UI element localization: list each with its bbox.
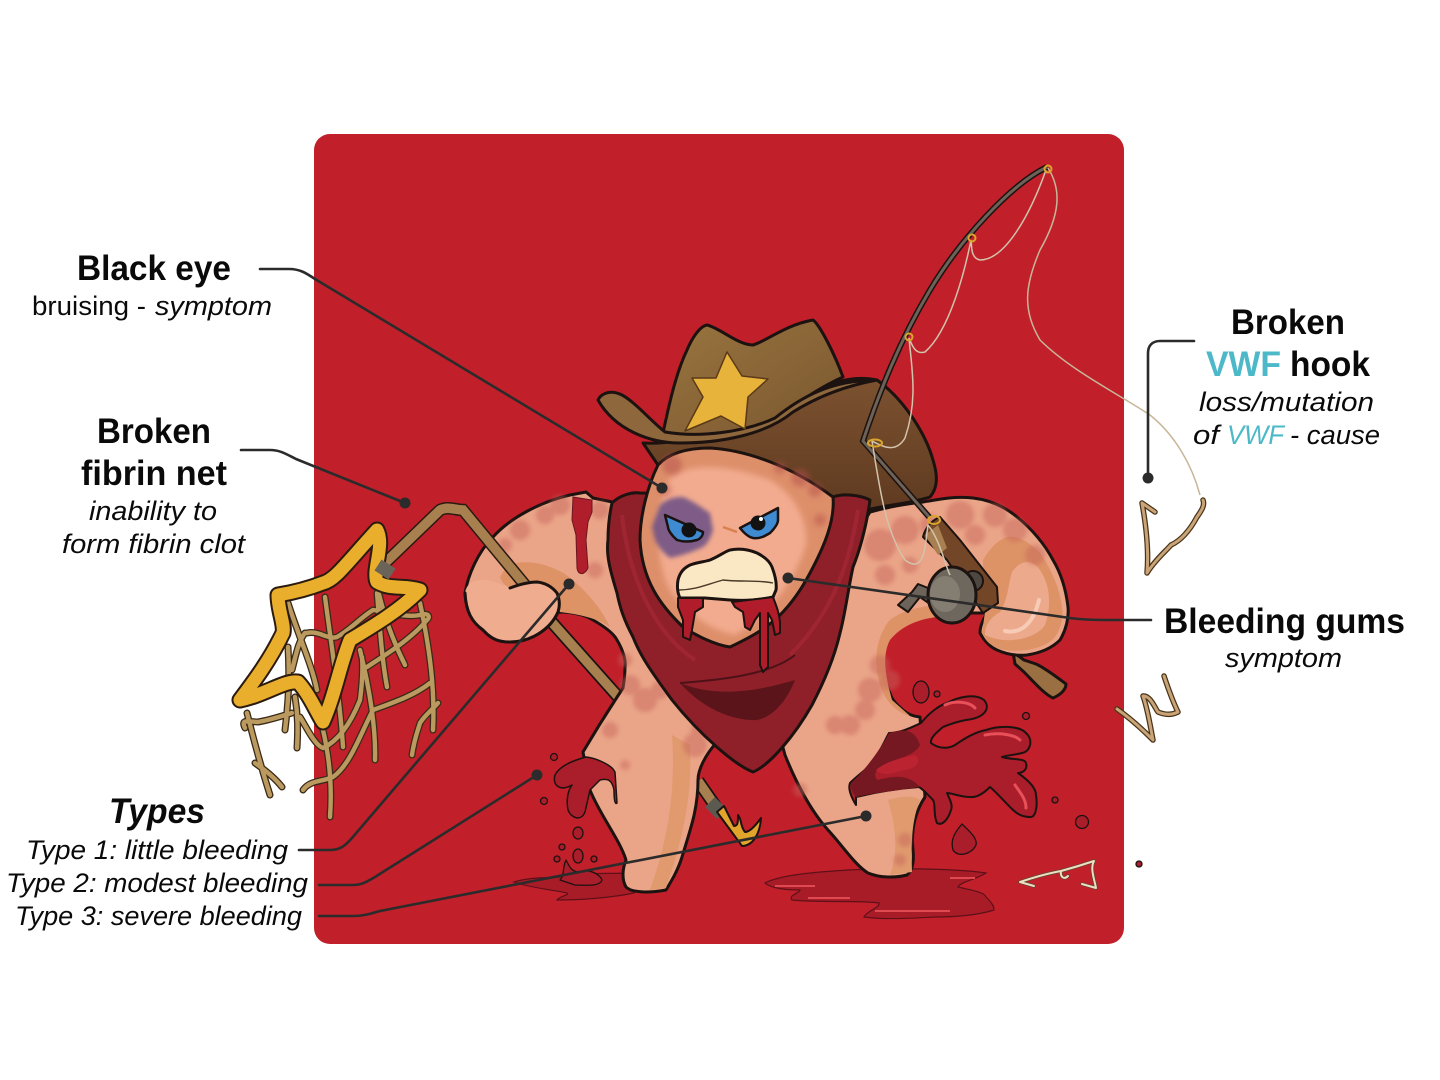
illustration: body with arms and legs [465, 492, 1068, 892]
label: broken VWF hook: loss/mutation [1199, 387, 1374, 417]
label: broken VWF hook: Broken [1231, 303, 1345, 342]
label: black eye: bruising - [32, 291, 146, 321]
icon: brow crease [723, 527, 737, 532]
label: broken VWF hook: VWF [1206, 345, 1281, 384]
label: broken fibrin net: inability to [89, 496, 217, 526]
callout: type 2 line [319, 770, 542, 885]
label: bleeding gums: Bleeding gums [1164, 602, 1405, 641]
callout: VWF hook line [1142, 341, 1194, 484]
label: bleeding gums: symptom [1225, 643, 1342, 673]
illustration: left leg wound [554, 757, 617, 818]
illustration: blood puddles [514, 869, 994, 919]
illustration: left arm wound [572, 497, 592, 574]
label: broken VWF hook: - cause [1290, 420, 1380, 450]
illustration: hat front [598, 320, 877, 443]
icon: bleeding gums [678, 597, 780, 672]
label: bleeding gums [1164, 602, 1405, 673]
callout: bleeding gums line [782, 572, 1151, 620]
illustration: rod butt [1013, 652, 1066, 698]
callout: type 1 line [299, 578, 574, 850]
label: broken VWF hook: of [1193, 420, 1222, 450]
illustration: blood splash and wounds [540, 497, 1142, 885]
illustration: hat back [643, 378, 936, 512]
label: broken VWF hook: hook [1290, 345, 1371, 384]
label: types: Types [109, 792, 205, 831]
callout: black eye line [260, 269, 668, 494]
illustration: left hand over pole [465, 580, 559, 642]
label: broken fibrin net: Broken [97, 412, 211, 451]
label: broken fibrin net [62, 412, 247, 559]
illustration: fishing rod and line [863, 166, 1200, 575]
icon: black eye bruise [652, 497, 713, 558]
icon: right eye [740, 508, 778, 538]
illustration: broken VWF hook [1020, 500, 1204, 888]
callout: fibrin net line [241, 450, 410, 508]
illustration: head and face [640, 448, 833, 672]
panel: red background [314, 134, 1124, 944]
label: types [6, 792, 308, 931]
label: types: Type 1: little bleeding [26, 835, 288, 865]
label: broken fibrin net: fibrin net [81, 454, 227, 493]
illustration: rod handle and reel [898, 517, 998, 623]
illustration: blood droplets [540, 681, 1142, 885]
label: broken fibrin net: form fibrin clot [62, 529, 247, 559]
icon: teeth [677, 549, 776, 600]
label: black eye [32, 249, 272, 321]
label: types: Type 2: modest bleeding [6, 868, 308, 898]
illustration: skin blotches [498, 495, 1045, 866]
illustration: bandana [607, 493, 870, 772]
label: broken VWF hook [1193, 303, 1380, 450]
icon: sheriff star [685, 352, 768, 431]
label: black eye: Black eye [77, 249, 231, 288]
illustration: fishing net pole lower part [548, 618, 761, 846]
label: black eye: symptom [155, 291, 272, 321]
illustration: broken fibrin net [240, 508, 525, 817]
icon: left eye [665, 515, 703, 542]
illustration: orange skin shading [500, 537, 1062, 890]
label: types: Type 3: severe bleeding [15, 901, 302, 931]
callout: type 3 line [319, 810, 872, 916]
label: broken VWF hook: VWF [1227, 420, 1285, 450]
